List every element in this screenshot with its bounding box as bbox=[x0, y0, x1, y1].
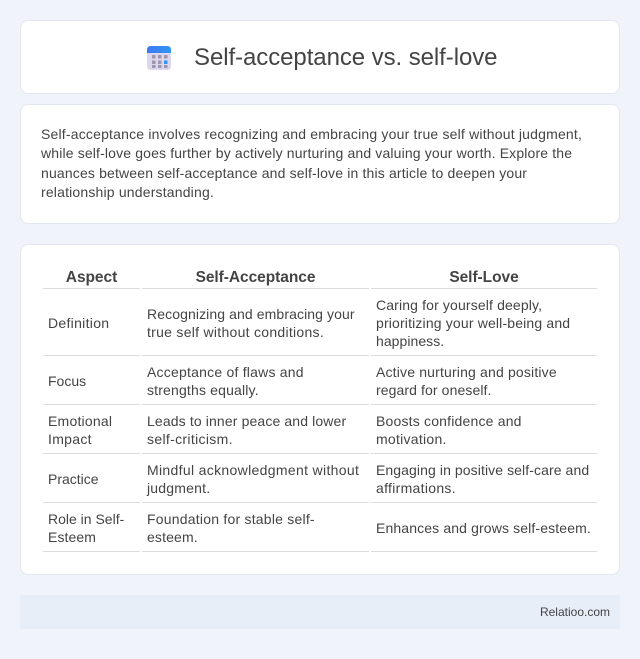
row: emotional impact: Boosts confidence and bbox=[376, 413, 522, 429]
row: focus: Focus bbox=[48, 373, 86, 389]
row: practice: affirmations. bbox=[376, 480, 456, 496]
row: focus: regard for oneself. bbox=[376, 382, 492, 398]
row: focus: Acceptance of flaws and bbox=[147, 364, 304, 380]
row: emotional impact: self-criticism. bbox=[147, 431, 233, 447]
row: definition: true self without conditions. bbox=[147, 324, 324, 340]
row: focus bbox=[48, 364, 557, 398]
row: practice: Mindful acknowledgment without bbox=[147, 462, 359, 478]
row: focus: Active nurturing and positive bbox=[376, 364, 557, 380]
intro card bbox=[20, 104, 620, 224]
intro text: Self-acceptance involves recognizing and embracing your true self without judgment, bbox=[41, 126, 582, 142]
row: definition: Recognizing and embracing your bbox=[147, 306, 355, 322]
icon: calendar bbox=[147, 46, 171, 70]
footer bar bbox=[20, 595, 620, 629]
row: emotional impact: Leads to inner peace and lower bbox=[147, 413, 346, 429]
table headers: Self-Love bbox=[449, 269, 519, 286]
title card bbox=[20, 20, 620, 94]
row: role in self-esteem: Enhances and grows self-esteem. bbox=[376, 520, 591, 536]
row: emotional impact: Emotional bbox=[48, 413, 112, 429]
row: focus: strengths equally. bbox=[147, 382, 259, 398]
row: definition: happiness. bbox=[376, 333, 444, 349]
row: emotional impact: motivation. bbox=[376, 431, 447, 447]
row: emotional impact: Impact bbox=[48, 431, 92, 447]
table headers bbox=[66, 269, 519, 286]
row: role in self-esteem: esteem. bbox=[147, 529, 198, 545]
row: role in self-esteem: Role in Self- bbox=[48, 511, 124, 527]
row: emotional impact bbox=[48, 413, 522, 447]
intro text bbox=[41, 126, 582, 200]
title: Self-acceptance vs. self-love bbox=[194, 44, 497, 71]
row: practice: judgment. bbox=[147, 480, 210, 496]
row: definition: prioritizing your well-being and bbox=[376, 315, 570, 331]
intro text: nuances between self-acceptance and self-love in this article to deepen your bbox=[41, 165, 527, 181]
row: role in self-esteem bbox=[48, 511, 591, 545]
row: definition bbox=[48, 297, 570, 349]
table headers: Self-Acceptance bbox=[196, 269, 315, 286]
row: definition: Caring for yourself deeply, bbox=[376, 297, 542, 313]
intro text: while self-love goes further by actively nurturing and valuing your worth. Explore the bbox=[41, 145, 572, 161]
intro text: relationship understanding. bbox=[41, 184, 214, 200]
row: role in self-esteem: Foundation for stable self- bbox=[147, 511, 315, 527]
row: practice: Engaging in positive self-care and bbox=[376, 462, 589, 478]
row: definition: Definition bbox=[48, 315, 109, 331]
table headers: Aspect bbox=[66, 269, 117, 286]
row: practice: Practice bbox=[48, 471, 99, 487]
row: role in self-esteem: Esteem bbox=[48, 529, 96, 545]
footer text: Relatioo.com bbox=[540, 605, 610, 619]
table card bbox=[20, 244, 620, 575]
row: practice bbox=[48, 462, 589, 496]
